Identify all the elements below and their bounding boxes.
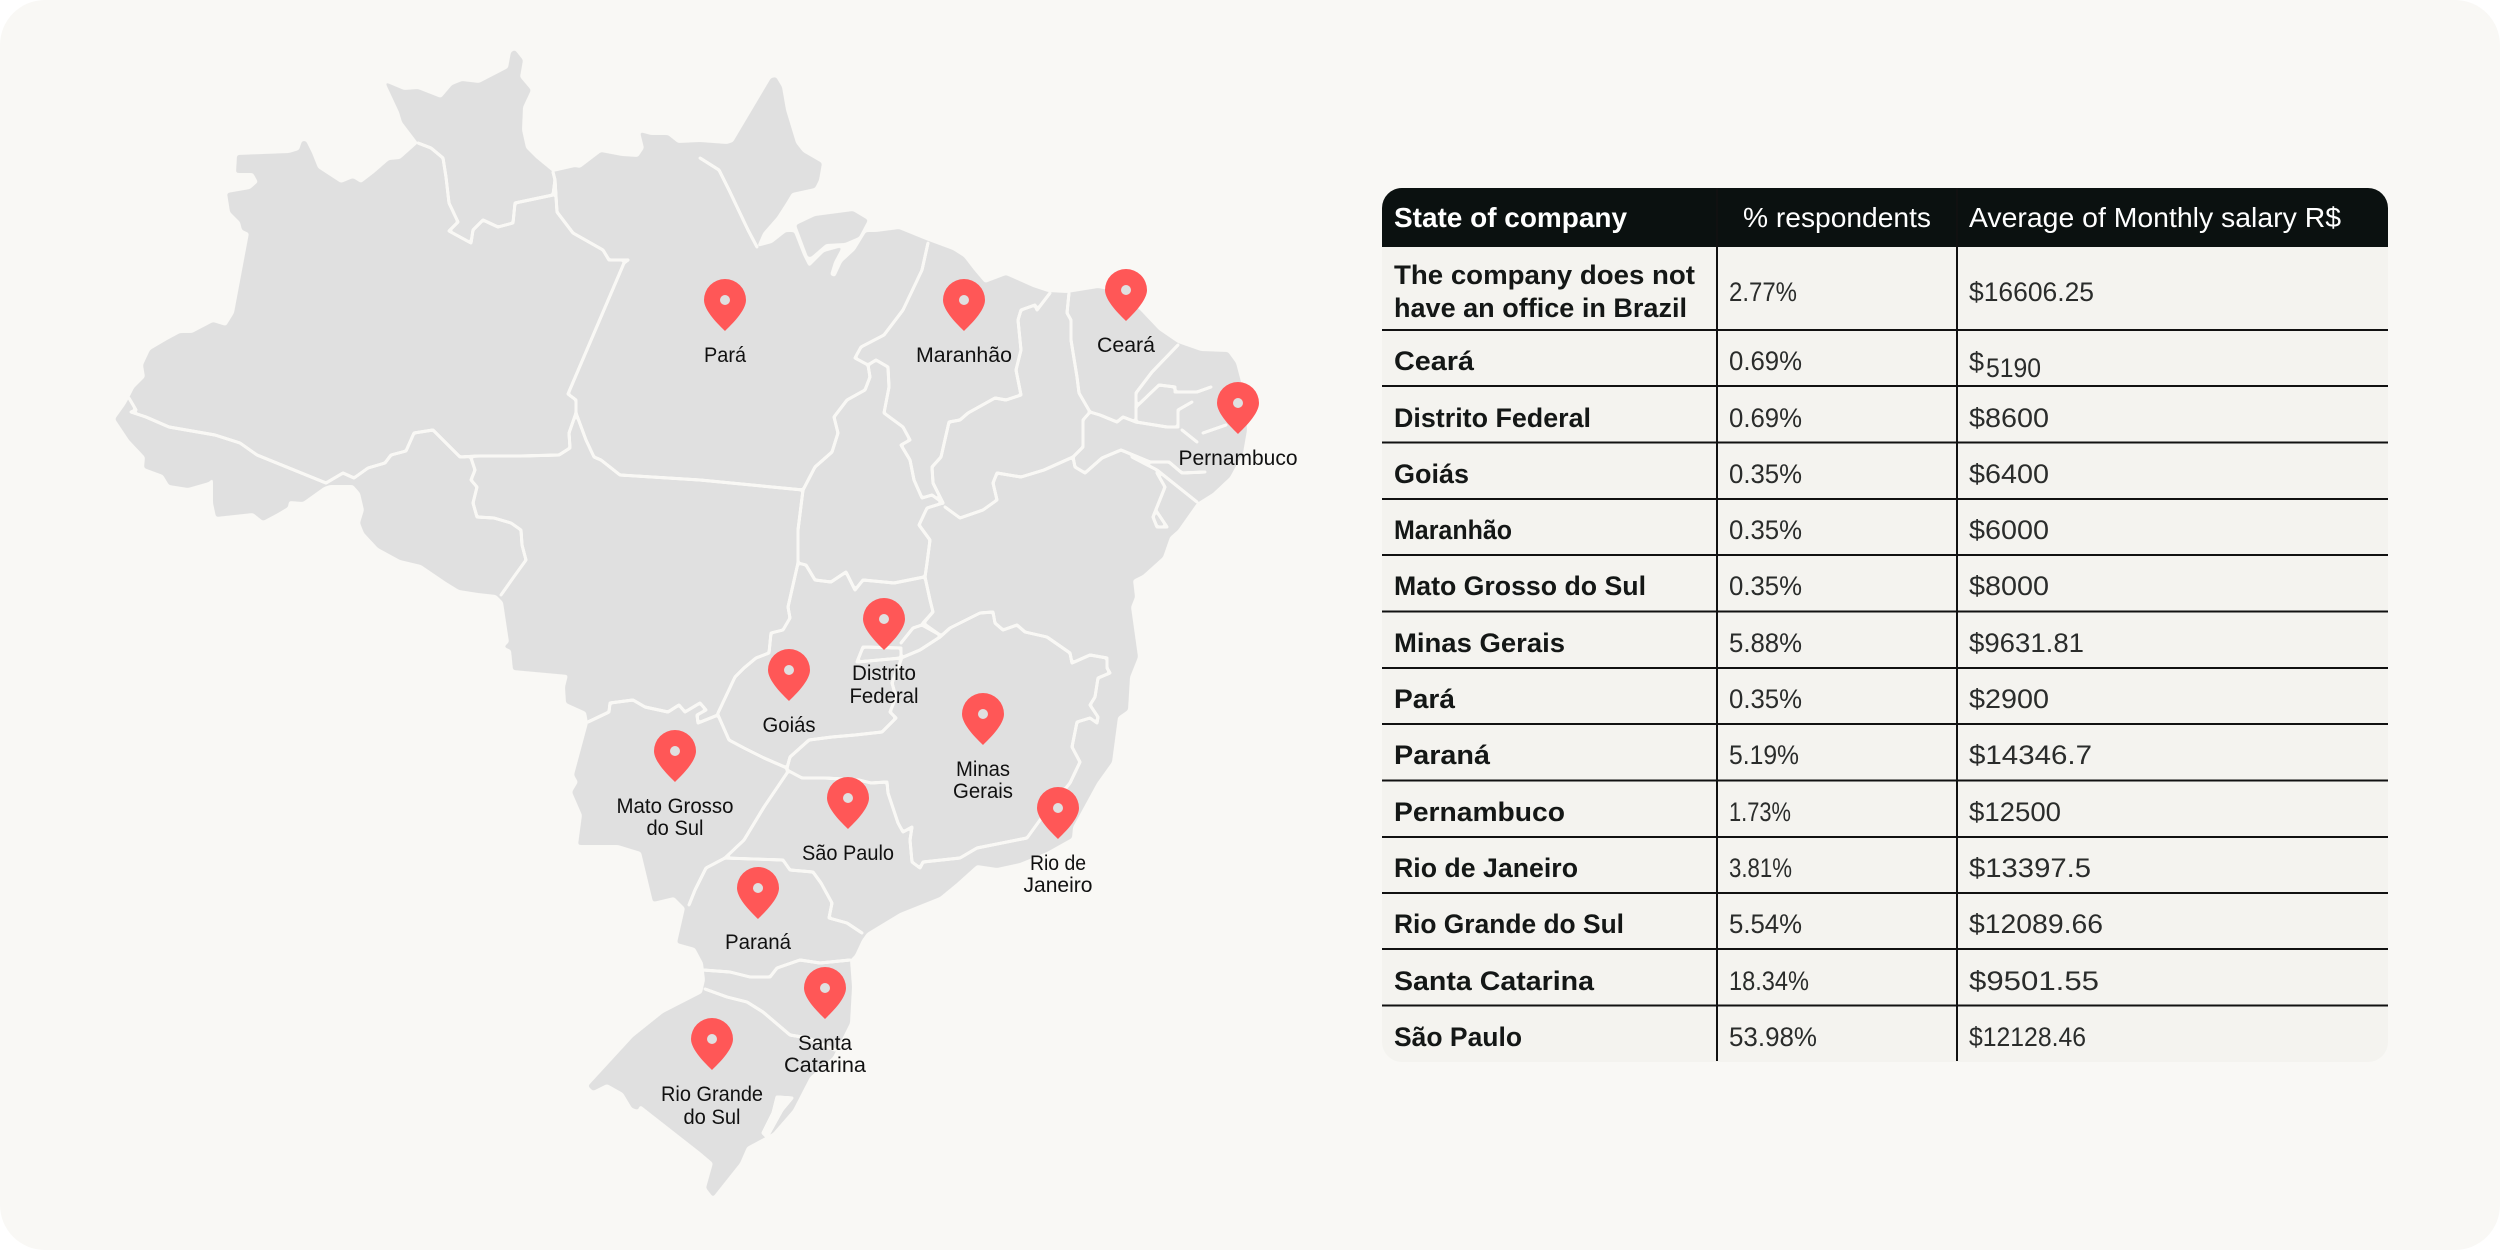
pin and label: Mato Grosso do Sul [616,730,734,840]
pin and label: Distrito Federal [850,598,918,708]
row: São Paulo: $12128.46 [1969,1022,2086,1052]
table header: Average of Monthly salary R$ [1969,202,2341,233]
row: São Paulo [1394,1022,2086,1052]
pin and label: Ceará: Ceará [1097,334,1155,357]
pin and label: Rio Grande do Sul: do Sul [684,1106,740,1129]
salary table [1382,188,2388,1062]
pin and label: Pará: Pará [704,344,746,367]
row: no office in Brazil: have an office in Brazil [1394,293,1687,323]
row: Minas Gerais: Minas Gerais [1394,628,1565,658]
pin and label: São Paulo [802,777,894,865]
row: Maranhão [1394,515,2049,545]
pin and label: Goiás [762,649,816,737]
row: Paraná: Paraná [1394,740,1491,770]
pin and label: Ceará [1097,269,1155,357]
row: Rio Grande do Sul [1394,909,2103,939]
pin and label: Pernambuco [1178,382,1298,470]
table header: State of company [1394,202,1627,233]
pin and label: Santa Catarina [784,967,866,1077]
row: Goiás: 0.35% [1729,459,1802,489]
row: Pará: $2900 [1969,684,2049,714]
row: no office in Brazil: 2.77% [1729,277,1797,307]
row: Pará: Pará [1394,684,1456,714]
pin and label: Pernambuco: Pernambuco [1178,447,1298,470]
row: Paraná [1394,740,2092,770]
row: Santa Catarina: Santa Catarina [1394,966,1595,996]
row: Distrito Federal [1394,403,2049,433]
row: Ceará: Ceará [1394,346,1475,376]
row: Distrito Federal: $8600 [1969,403,2049,433]
pin and label: Santa Catarina: Catarina [784,1054,866,1077]
row: Paraná: $14346.7 [1969,740,2092,770]
row: Rio Grande do Sul: $12089.66 [1969,909,2103,939]
row: Rio Grande do Sul: Rio Grande do Sul [1394,909,1624,939]
pin and label: Rio Grande do Sul [661,1018,763,1129]
pin and label: Minas Gerais: Minas [956,758,1010,781]
pin and label: São Paulo: São Paulo [802,842,894,865]
pin and label: Rio de Janeiro: Janeiro [1024,874,1092,897]
state borders [129,143,1226,1137]
row: São Paulo: São Paulo [1394,1022,1522,1052]
row: Ceará: 5190 [1986,353,2041,383]
row: Distrito Federal: Distrito Federal [1394,403,1591,433]
row: Rio de Janeiro: Rio de Janeiro [1394,853,1578,883]
row: São Paulo: 53.98% [1729,1022,1817,1052]
row: Minas Gerais: $9631.81 [1969,628,2084,658]
pin and label: Distrito Federal: Federal [850,685,918,708]
pin and label: Mato Grosso do Sul: Mato Grosso [616,795,734,818]
pin and label: Rio de Janeiro: Rio de [1030,852,1086,875]
row: Rio de Janeiro: 3.81% [1729,853,1792,883]
pin and label: Maranhão: Maranhão [916,344,1012,367]
row: Goiás: Goiás [1394,459,1469,489]
row: Minas Gerais [1394,628,2084,658]
row: no office in Brazil: $16606.25 [1969,277,2094,307]
pin and label: Minas Gerais: Gerais [953,780,1013,803]
pin and label: Rio de Janeiro [1024,787,1092,897]
row: Paraná: 5.19% [1729,740,1799,770]
row: Ceará [1394,346,2041,383]
pin and label: Mato Grosso do Sul: do Sul [646,817,704,840]
pin and label: Maranhão [916,279,1012,367]
row: Santa Catarina: $9501.55 [1969,966,2099,996]
row: Mato Grosso do Sul: Mato Grosso do Sul [1394,571,1646,601]
row: Santa Catarina: 18.34% [1729,966,1809,996]
pin and label: Distrito Federal: Distrito [852,662,916,685]
row: Maranhão: Maranhão [1394,515,1512,545]
row: Santa Catarina [1394,966,2099,996]
row: Mato Grosso do Sul [1394,571,2049,601]
pin and label: Goiás: Goiás [762,714,816,737]
row: Minas Gerais: 5.88% [1729,628,1802,658]
row: no office in Brazil: The company does not [1394,260,1695,290]
row: Pernambuco [1394,797,2061,827]
row: Pará: 0.35% [1729,684,1802,714]
row: Goiás [1394,459,2049,489]
row: Mato Grosso do Sul: $8000 [1969,571,2049,601]
pin and label: Paraná: Paraná [725,931,791,954]
row: Pernambuco: $12500 [1969,797,2061,827]
pin and label: Rio Grande do Sul: Rio Grande [661,1083,763,1106]
row: Maranhão: $6000 [1969,515,2049,545]
pin and label: Minas Gerais [953,693,1013,803]
country silhouette [115,50,1247,1197]
row: Rio Grande do Sul: 5.54% [1729,909,1802,939]
row: no office in Brazil [1394,260,2094,323]
row: Goiás: $6400 [1969,459,2049,489]
map of Brazil [115,50,1247,1197]
row: Pernambuco: Pernambuco [1394,797,1565,827]
row: Rio de Janeiro: $13397.5 [1969,853,2091,883]
row: Pará [1394,684,2049,714]
table header: % respondents [1743,202,1931,233]
row: Distrito Federal: 0.69% [1729,403,1802,433]
row: Maranhão: 0.35% [1729,515,1802,545]
table body background [1382,188,2388,1062]
pin and label: Pará [704,279,746,367]
pin and label: Santa Catarina: Santa [798,1032,852,1055]
row: Ceará: 0.69% [1729,346,1802,376]
row: Ceará: $ [1969,347,1984,377]
pin and label: Paraná [725,867,791,954]
row: Rio de Janeiro [1394,853,2091,883]
row: Mato Grosso do Sul: 0.35% [1729,571,1802,601]
row: Pernambuco: 1.73% [1729,797,1791,827]
table header [1382,188,2388,247]
